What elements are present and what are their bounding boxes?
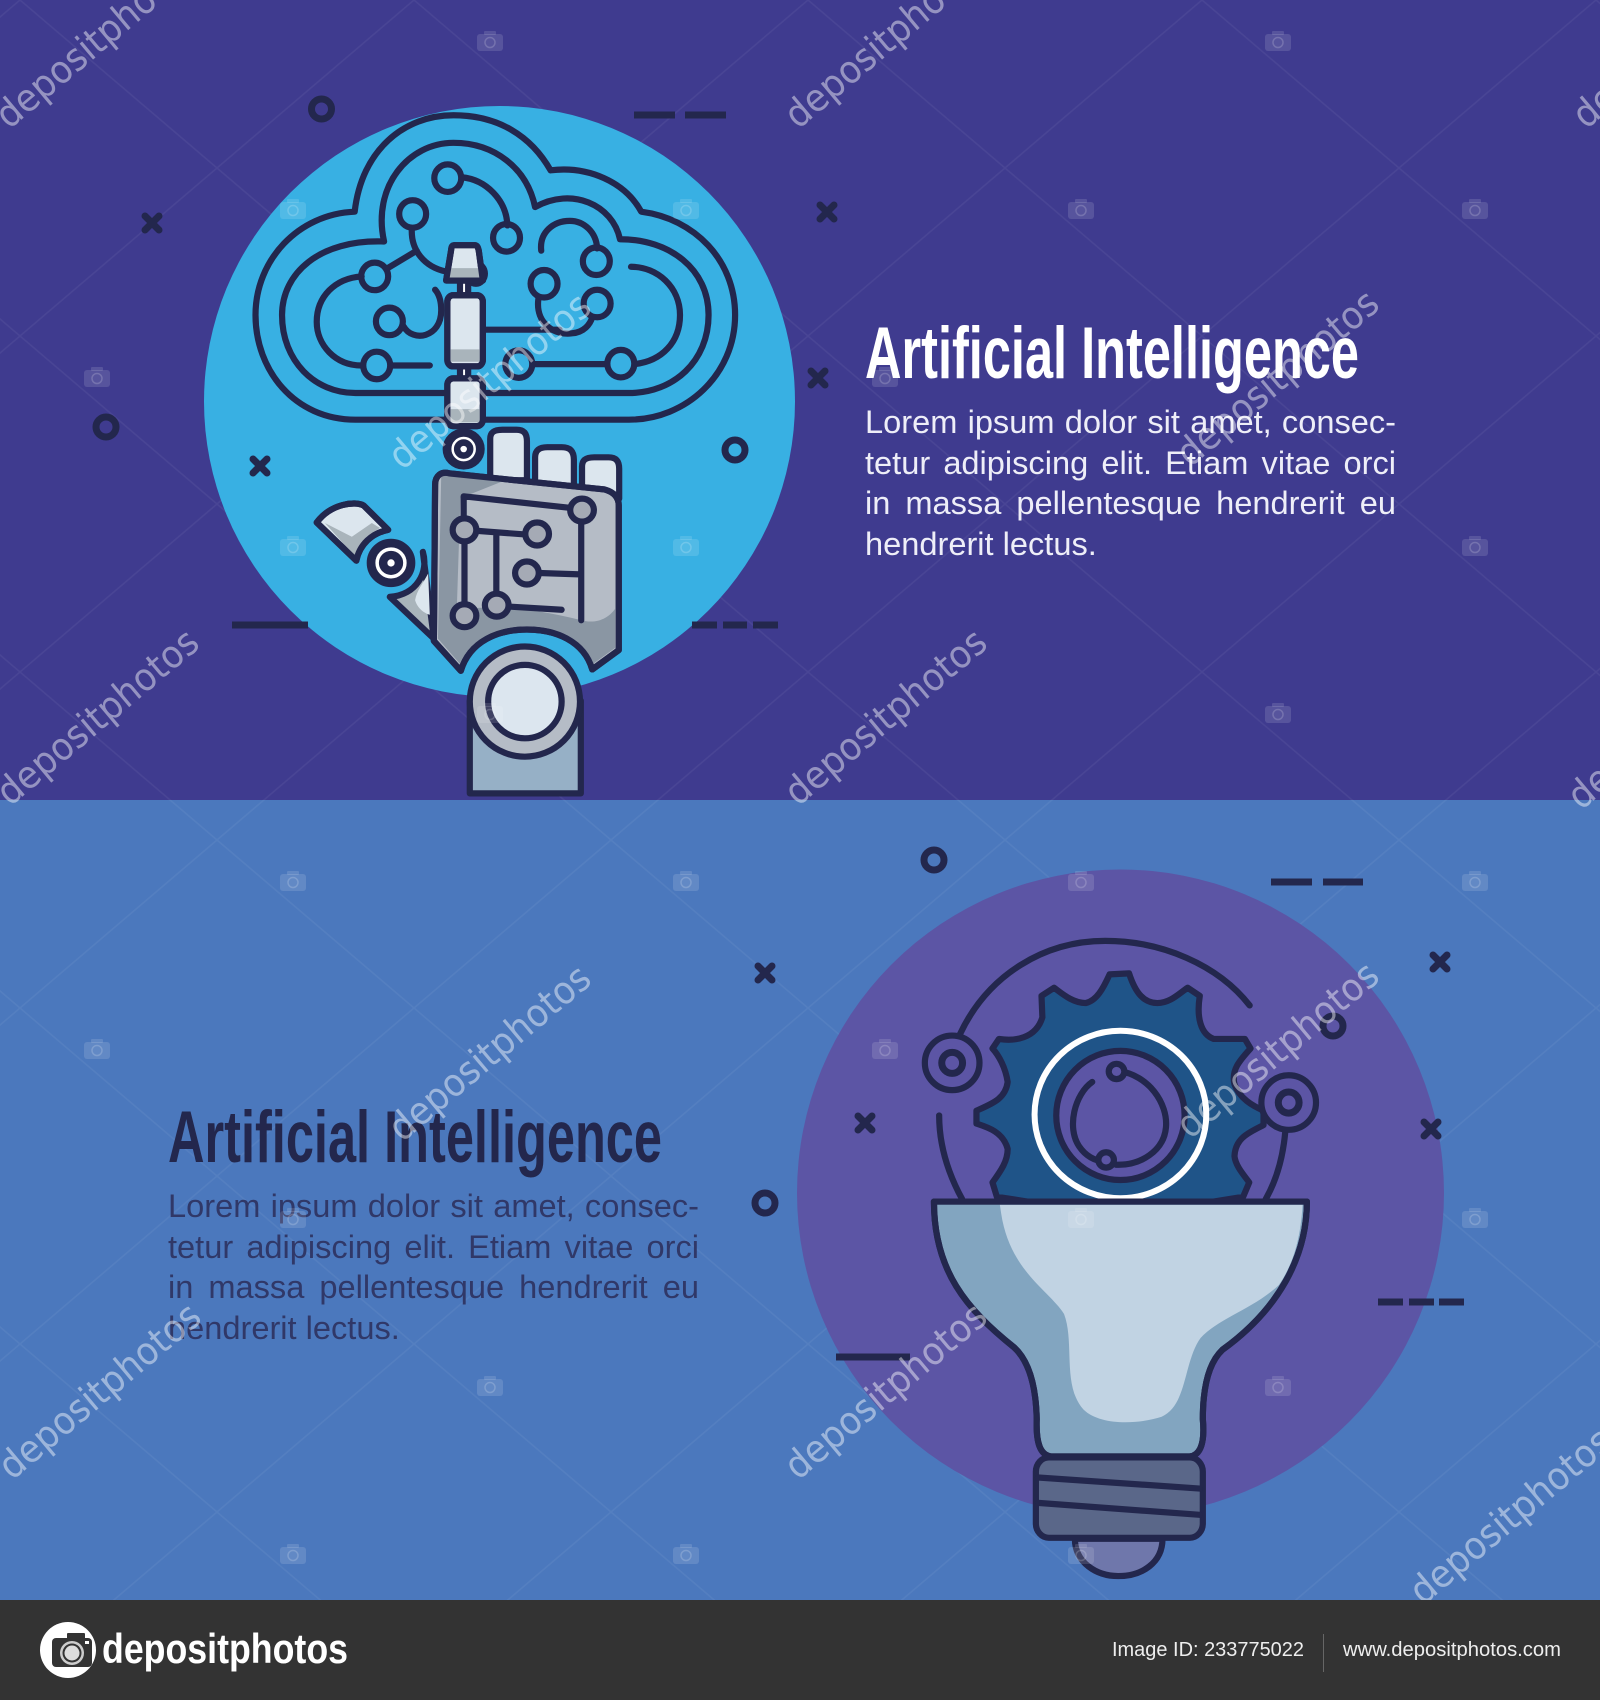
text block: bottom body copy: in massa pellentesque hendrerit eu [168, 1268, 699, 1305]
left node [925, 1036, 979, 1090]
icon: footer camera logo [40, 1622, 96, 1678]
footer brand name: depositphotos [102, 1625, 348, 1672]
robot index finger [446, 245, 485, 466]
icon: cloud circuit with robot hand [256, 115, 735, 793]
watermark text: depositphotos [1168, 280, 1387, 475]
footer site url: www.depositphotos.com [1342, 1639, 1561, 1661]
heading: top: Artificial Intelligence [865, 313, 1359, 394]
text block: top body copy [865, 403, 1396, 562]
watermark text: depositphotos [1168, 952, 1387, 1147]
cloud outlines [256, 115, 735, 420]
cloud circuit traces [317, 164, 680, 379]
robot wrist [470, 646, 581, 793]
watermark text: depositphotos [776, 1293, 995, 1488]
icon: light bulb with gear [925, 941, 1316, 1576]
watermark text: depositphotos [776, 619, 995, 814]
bulb glass [934, 1202, 1307, 1456]
heading: bottom: Artificial Intelligence [168, 1097, 662, 1178]
bulb screw base [1036, 1457, 1203, 1538]
circle: bottom purple backdrop [797, 870, 1444, 1516]
panel: bottom blue band [0, 800, 1600, 1600]
text block: bottom body copy: Lorem ipsum dolor sit amet, consec- [168, 1187, 699, 1224]
decorative marks: bottom panel [755, 850, 1464, 1357]
text block: bottom body copy [168, 1187, 699, 1346]
panel: top indigo band [0, 0, 1600, 800]
watermark text: depositphotos [380, 955, 599, 1150]
watermark text: depositphotos [380, 283, 599, 478]
robot thumb [317, 504, 434, 639]
watermark camera icons [84, 31, 1488, 1564]
footer bar [0, 1600, 1600, 1700]
circle: top cyan backdrop [204, 106, 795, 697]
gear [976, 973, 1264, 1202]
robot palm with circuit [434, 473, 619, 671]
decorative marks: top panel [96, 99, 834, 625]
robot other fingers [490, 430, 619, 499]
footer separator [1323, 1634, 1324, 1672]
text block: bottom body copy: tetur adipiscing elit. Etiam vitae orci [168, 1228, 699, 1265]
text block: top body copy: hendrerit lectus. [865, 525, 1097, 562]
text block: top body copy: Lorem ipsum dolor sit amet, consec- [865, 403, 1396, 440]
right node [1261, 1075, 1316, 1130]
text block: bottom body copy: hendrerit lectus. [168, 1309, 400, 1346]
footer image id: Image ID: 233775022 [1112, 1639, 1304, 1661]
bulb tip [1075, 1539, 1162, 1576]
text block: top body copy: tetur adipiscing elit. Etiam vitae orci [865, 444, 1396, 481]
text block: top body copy: in massa pellentesque hendrerit eu [865, 484, 1396, 521]
orbit arcs [939, 941, 1285, 1199]
